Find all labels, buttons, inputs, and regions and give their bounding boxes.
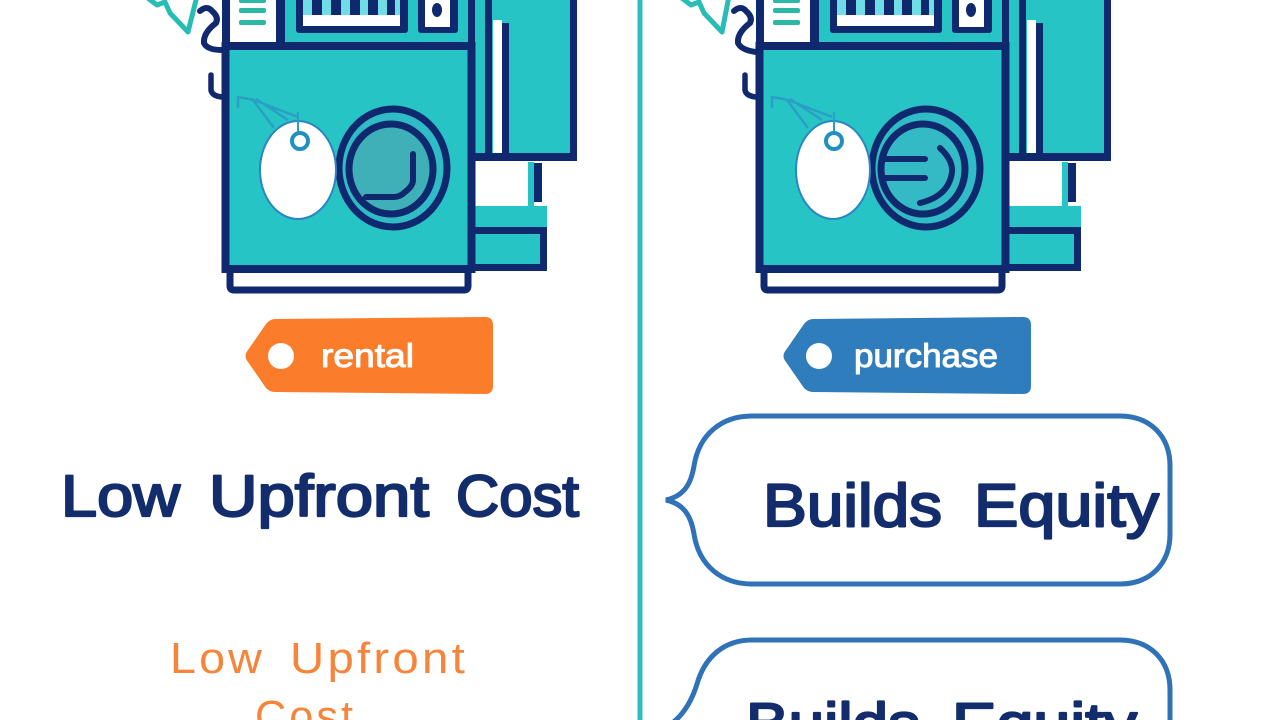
purchase tag: purchase: [854, 337, 998, 374]
purchase tag: [784, 317, 1031, 394]
heading: low upfront cost: [61, 464, 579, 529]
machine base: [764, 270, 1002, 290]
rental tag: [246, 317, 493, 394]
hang tag: [772, 97, 870, 219]
orange text: low upfront cost: [170, 634, 468, 720]
callout: builds equity: [666, 416, 1170, 584]
heading: low upfront cost: Upfront: [209, 464, 429, 529]
machine body: [226, 46, 472, 269]
hang tag: [238, 97, 336, 219]
icon: purchase washing machine: [679, 0, 1111, 290]
callout: builds equity: Equity: [974, 472, 1159, 539]
heading: low upfront cost: Low: [61, 464, 181, 529]
machine base: [230, 270, 468, 290]
rental tag: rental: [321, 337, 414, 374]
drum: [339, 109, 447, 227]
drum: [872, 109, 980, 227]
heading: low upfront cost: Cost: [456, 464, 579, 529]
top control panel: [764, 0, 1002, 42]
orange text: low upfront cost: Upfront: [290, 634, 468, 683]
icon: rental washing machine: [145, 0, 577, 290]
callout: builds equity repeated: [668, 640, 1170, 720]
top control panel: [230, 0, 468, 42]
side panel: [470, 0, 577, 271]
hooks: [200, 8, 222, 50]
center divider: [638, 0, 642, 720]
hooks: [734, 8, 756, 52]
machine body: [760, 46, 1006, 269]
callout: builds equity: Builds: [763, 472, 942, 539]
orange text: low upfront cost: Low: [170, 634, 265, 683]
speech shape top left: [679, 0, 729, 32]
side panel: [1004, 0, 1111, 271]
speech shape top left: [145, 0, 197, 32]
